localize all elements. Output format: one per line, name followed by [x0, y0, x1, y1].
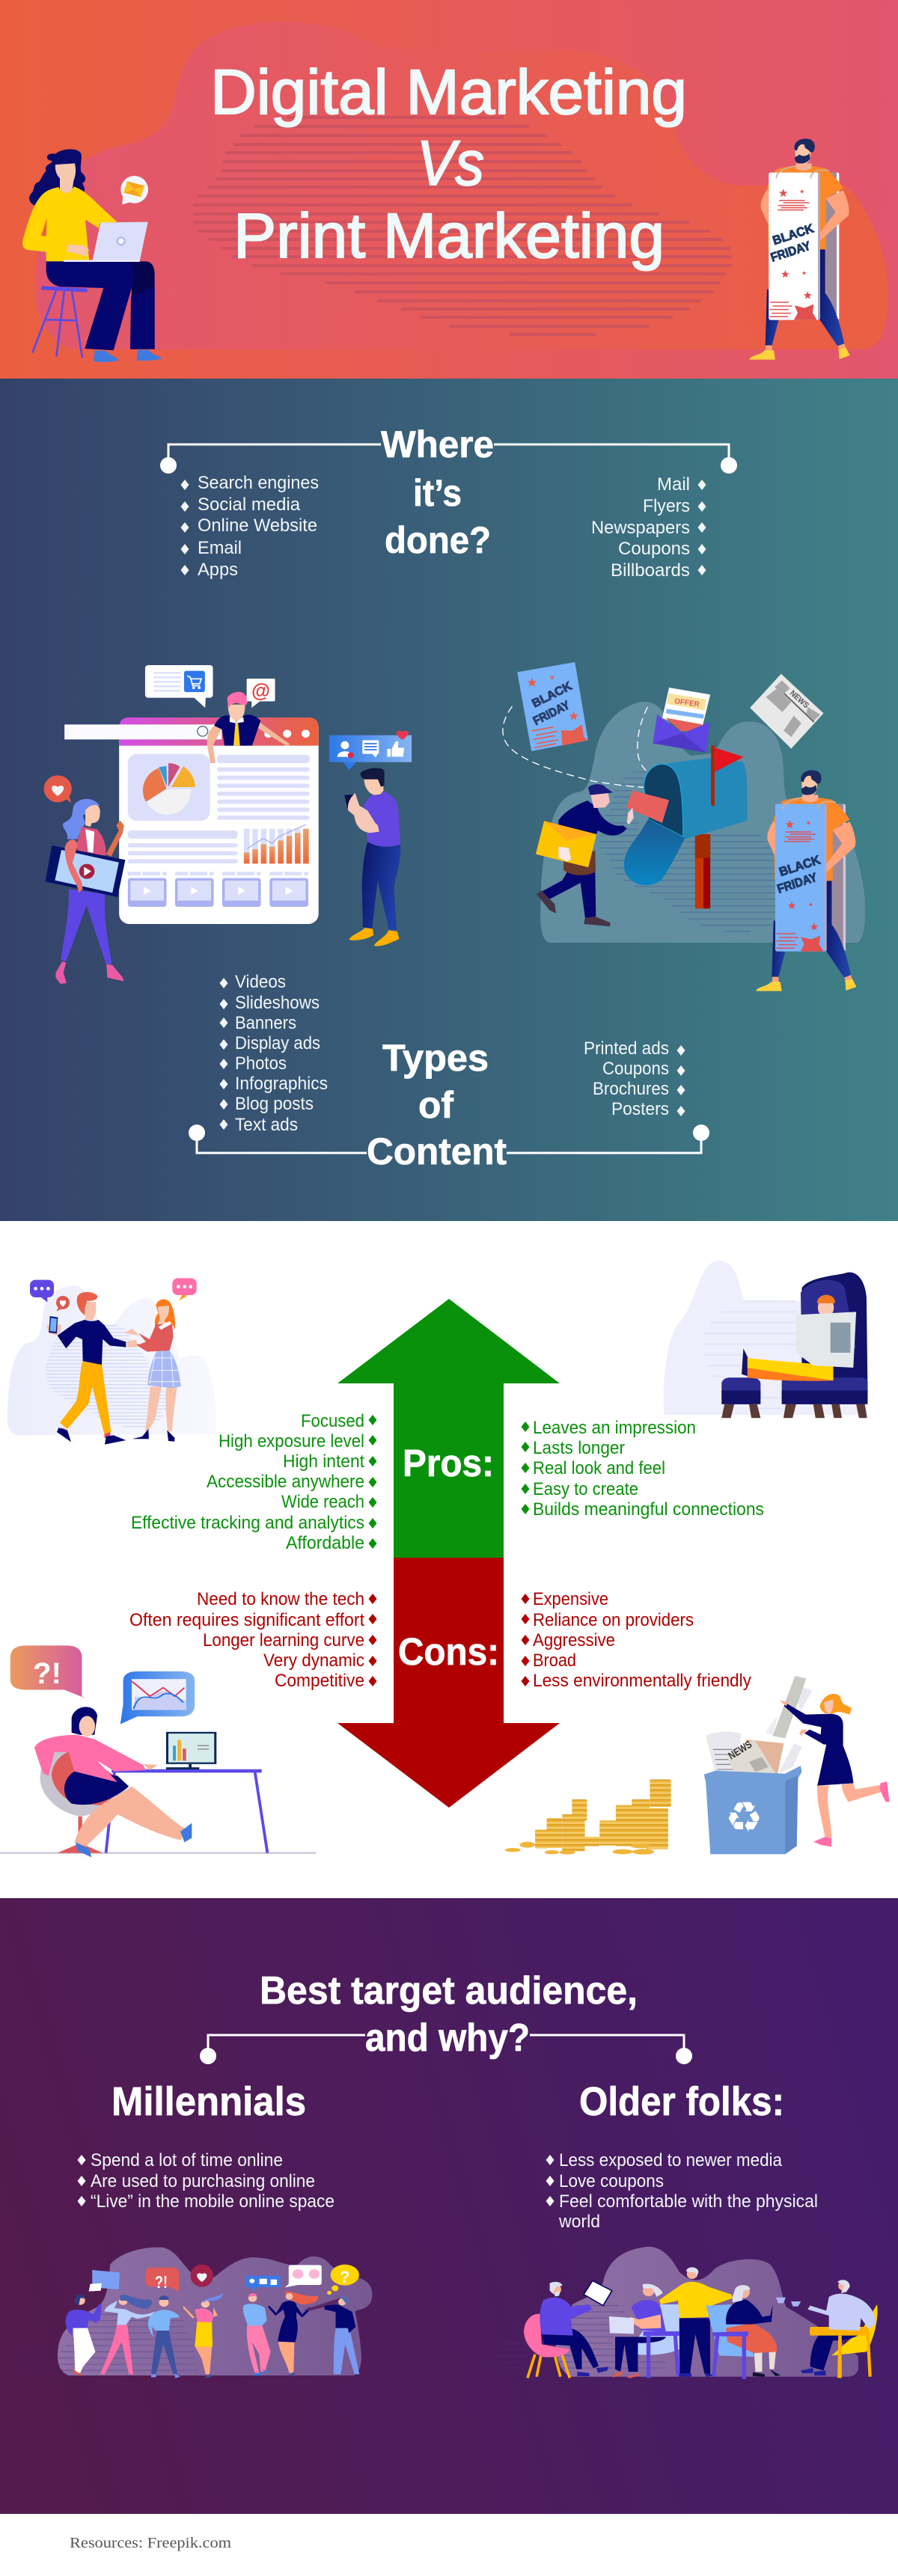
coin stacks	[505, 1779, 671, 1855]
person 4	[183, 2292, 226, 2378]
browser window	[64, 718, 319, 924]
illustration: print marketing mailbox scene	[503, 662, 865, 991]
list: digital pros: High intent	[283, 1451, 364, 1472]
label: ?! speech bubble text: ?!	[33, 1657, 61, 1690]
heading: Best target audience	[260, 1969, 638, 2060]
newspaper	[750, 674, 824, 749]
footer: credits: Resources: Freepik.com	[70, 2535, 231, 2551]
title: Print Marketing	[233, 201, 665, 271]
man with blue sandwich board	[756, 770, 856, 991]
panel: hero header	[0, 0, 898, 379]
list: print pros: Leaves an impression	[533, 1418, 696, 1438]
title: Vs	[417, 128, 484, 198]
illustration: woman with laptop on stool	[22, 149, 162, 362]
list: older folks reasons: Less exposed to newer media	[559, 2150, 783, 2170]
list: print content types: Brochures	[593, 1079, 669, 1099]
illustration: man wearing Black Friday sandwich board: FRIDAY	[769, 239, 813, 265]
list: digital channels: Email	[198, 538, 242, 558]
newspaper: NEWS	[788, 689, 810, 710]
list: print channels: Newspapers	[591, 518, 690, 538]
woman holding tablet	[44, 775, 125, 984]
person: man reading on pink chair	[524, 2280, 612, 2378]
heading: Types of Content	[367, 1037, 507, 1172]
list: digital pros: Accessible anywhere	[207, 1472, 364, 1492]
heading: Older folks: Older folks:	[579, 2079, 784, 2124]
list: print channels: Flyers	[643, 496, 690, 516]
list: digital pros: Wide reach	[281, 1492, 364, 1512]
Black Friday flyer: FRIDAY	[531, 698, 572, 728]
list: older folks reasons: world	[558, 2212, 600, 2232]
person 6	[268, 2292, 318, 2375]
list: digital cons: Competitive	[275, 1671, 364, 1691]
background blob	[36, 22, 888, 349]
list: digital cons: Need to know the tech	[197, 1589, 364, 1609]
list: print pros: Lasts longer	[533, 1438, 625, 1458]
chat and heart bubbles	[30, 1278, 197, 1312]
person: woman with laptop	[609, 2283, 679, 2378]
man with blue sandwich board: FRIDAY	[775, 870, 819, 896]
illustration: digital marketing browser with people	[44, 665, 412, 984]
panel: target audience (purple)	[0, 1898, 898, 2514]
label: ?! bubble text: ?!	[155, 2272, 168, 2292]
Black Friday flyer	[517, 662, 588, 751]
connector: types of content	[189, 1125, 709, 1153]
list: print cons: Reliance on providers	[533, 1610, 694, 1630]
list: print content types: Coupons	[602, 1059, 669, 1079]
mailbox	[624, 747, 748, 908]
list: digital content types: Text ads	[235, 1115, 298, 1135]
list: digital channels: Search engines	[198, 473, 319, 493]
panel: where and content (teal)	[0, 379, 898, 1221]
heading: Best target audience: and why?	[365, 2016, 530, 2060]
icon: social reactions bubble	[329, 731, 412, 770]
list: digital pros: Affordable	[286, 1533, 364, 1553]
person: standing man in yellow	[659, 2267, 733, 2377]
list: digital content types: Blog posts	[235, 1094, 314, 1114]
list: digital pros: Effective tracking and analytics	[131, 1513, 364, 1533]
list: millennials reasons: “Live” in the mobile online space	[91, 2191, 335, 2212]
person 3	[148, 2295, 180, 2378]
illustration: reader in armchair	[664, 1261, 867, 1418]
connector: target audience	[200, 2035, 692, 2064]
woman throwing paper	[780, 1694, 890, 1847]
label: question mark bubble text: ?	[340, 2268, 349, 2286]
title	[210, 57, 687, 271]
list: print cons	[521, 1589, 751, 1691]
list: print cons: Aggressive	[533, 1630, 615, 1650]
list: print content types: Posters	[611, 1099, 669, 1119]
list: millennials reasons	[78, 2150, 335, 2212]
list: millennials reasons: Are used to purchasing online	[91, 2171, 315, 2191]
list: print channels: Billboards	[611, 560, 690, 581]
list: digital channels	[181, 473, 319, 580]
person leaning on browser	[207, 692, 290, 763]
person 5	[243, 2293, 271, 2375]
illustration: man wearing Black Friday sandwich board	[750, 138, 850, 360]
panel: pros and cons (white)	[0, 1221, 898, 1898]
illustration: man wearing Black Friday sandwich board: BLACK	[771, 221, 816, 248]
list: digital content types: Slideshows	[235, 993, 320, 1013]
person 7	[304, 2297, 359, 2374]
postman	[536, 784, 634, 926]
list: print pros	[521, 1418, 764, 1520]
offer envelope	[653, 688, 710, 753]
list: digital cons: Longer learning curve	[203, 1630, 364, 1650]
hatched stripes	[193, 117, 732, 334]
list: print cons: Expensive	[533, 1589, 608, 1609]
illustration: woman at desk	[0, 1645, 316, 1857]
person with phone	[344, 768, 400, 946]
list: digital content types: Infographics	[235, 1074, 328, 1094]
waste paper	[706, 1676, 812, 1775]
illustration: coins and recycling bin	[505, 1676, 890, 1855]
list: digital channels: Apps	[198, 560, 238, 580]
list: print pros: Builds meaningful connections	[533, 1499, 764, 1520]
list: digital content types: Photos	[235, 1053, 287, 1074]
list: print content types	[584, 1038, 685, 1119]
label: Pros: Pros:	[403, 1442, 494, 1484]
list: digital pros: High exposure level	[219, 1431, 364, 1451]
red envelope	[626, 791, 669, 823]
man with blue sandwich board: BLACK	[778, 853, 822, 879]
person 2	[100, 2295, 155, 2374]
illustration: older folks group	[487, 2247, 878, 2383]
list: digital pros	[131, 1411, 377, 1553]
list: print pros: Easy to create	[533, 1479, 638, 1499]
icon: recycling symbol: ♻	[725, 1793, 763, 1842]
arrow: cons down	[337, 1558, 560, 1808]
list: digital cons: Very dynamic	[263, 1650, 364, 1671]
list: print content types: Printed ads	[584, 1038, 669, 1059]
heading: Millennials: Millennials	[112, 2079, 306, 2124]
list: digital pros: Focused	[301, 1411, 364, 1431]
heading: Where it's done?: done?	[385, 519, 491, 561]
list: digital content types: Videos	[235, 972, 286, 992]
list: print cons: Less environmentally friendly	[533, 1671, 751, 1691]
icon: at-sign bubble	[247, 679, 275, 708]
heading: Types of Content: Content	[367, 1131, 507, 1172]
list: digital content types: Banners	[235, 1013, 296, 1033]
background blob	[540, 702, 865, 943]
heading: Types of Content: of	[418, 1084, 453, 1126]
list: digital cons: Often requires significant effort	[129, 1610, 364, 1630]
icon: at-sign bubble: @	[251, 679, 270, 701]
heading: Types of Content: Types	[382, 1037, 489, 1079]
person 1	[66, 2295, 102, 2375]
list: older folks reasons: Love coupons	[559, 2171, 664, 2191]
title: Digital Marketing	[210, 57, 687, 127]
footer: credits	[0, 2514, 898, 2576]
list: digital content types: Display ads	[235, 1033, 320, 1053]
list: print cons: Broad	[533, 1650, 576, 1671]
label: Cons: Cons:	[398, 1630, 499, 1673]
illustration: millennials group	[19, 2248, 372, 2387]
list: digital cons	[129, 1589, 377, 1691]
list: older folks reasons: Feel comfortable with the physical	[559, 2191, 818, 2212]
list: digital channels: Online Website	[198, 515, 317, 536]
bubbles	[89, 2265, 359, 2295]
list: millennials reasons: Spend a lot of time online	[91, 2150, 283, 2170]
woman in checked skirt	[124, 1299, 181, 1442]
arrow: pros up	[337, 1299, 560, 1558]
person: man in checked shirt on yellow chair	[801, 2280, 878, 2378]
heading: Where it's done?: it’s	[413, 472, 462, 514]
illustration: couple talking	[7, 1278, 216, 1445]
connector: where it's done	[160, 444, 737, 474]
bin side shade	[785, 1775, 798, 1854]
list: print channels	[591, 474, 706, 581]
heading: Where it's done?	[381, 423, 494, 561]
list: digital content types	[220, 972, 328, 1135]
recycling bin	[704, 1766, 802, 1854]
list: print channels: Mail	[657, 474, 690, 495]
icon: cart speech bubble	[145, 665, 213, 708]
heading: Best target audience: Best target audience,	[260, 1969, 638, 2013]
label: NEWS on paper: NEWS	[726, 1738, 754, 1762]
list: print pros: Real look and feel	[533, 1458, 665, 1478]
Black Friday flyer: BLACK	[530, 679, 575, 711]
list: digital channels: Social media	[198, 495, 301, 515]
offer envelope: OFFER	[674, 697, 700, 709]
list: print channels: Coupons	[618, 539, 690, 559]
list: older folks reasons	[546, 2150, 818, 2232]
heading: Where it's done?: Where	[381, 423, 494, 465]
man with phone	[47, 1292, 126, 1445]
person: woman with tea	[706, 2285, 801, 2379]
dashed flight paths	[503, 706, 659, 788]
